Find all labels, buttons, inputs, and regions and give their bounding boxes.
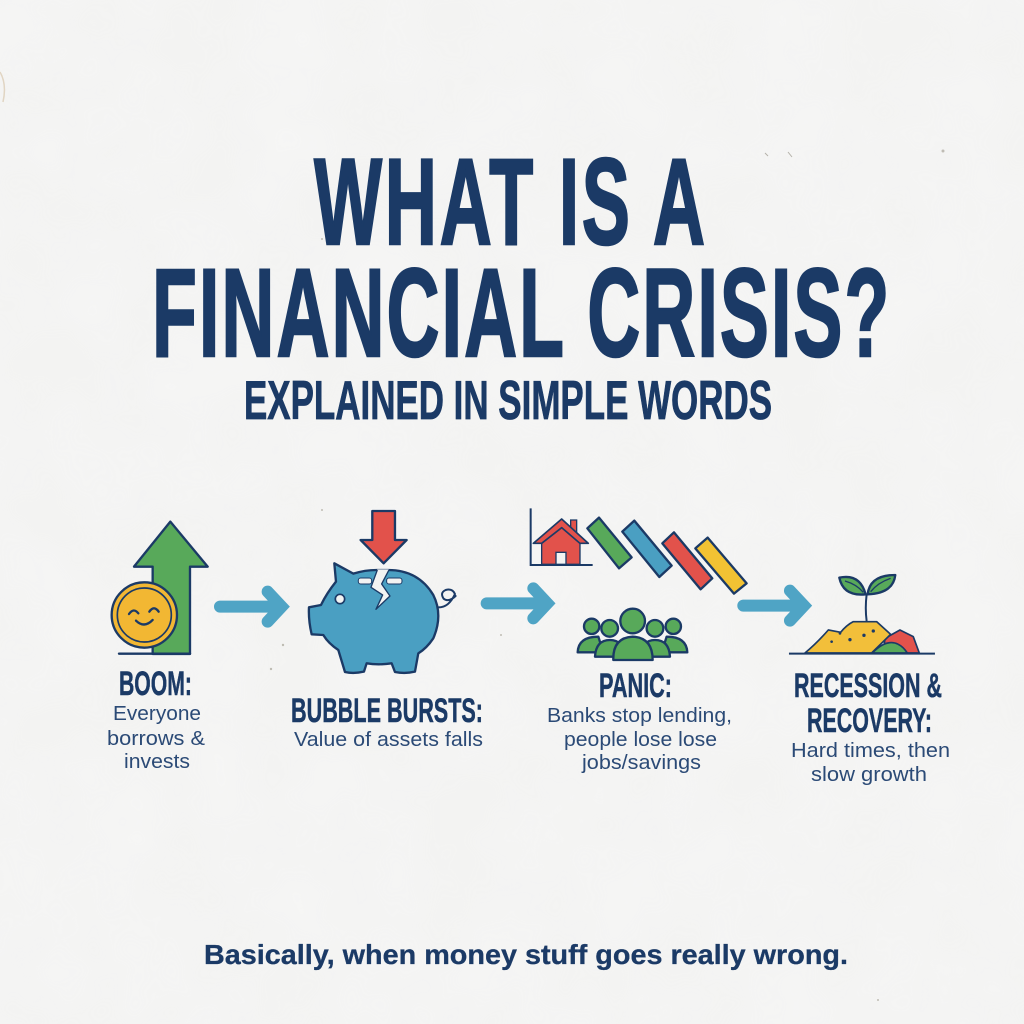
title: WHAT IS A [314,134,705,271]
footer tagline: Basically, when money stuff goes really wrong. [204,939,848,970]
arrow: bubble to panic [487,588,547,618]
step: bubble bursts [291,511,483,751]
text: boom description: Everyone [113,703,201,725]
text: panic description: people lose lose [564,729,717,751]
arrow: boom to bubble [220,592,282,622]
icon: sprout growing from mound [789,575,935,654]
icon: group of people [578,609,687,660]
icon: cracked piggy bank with red arrow [309,511,456,673]
text: bubble bursts description: Value of assets falls [294,729,483,751]
step: panic [531,508,747,774]
arrow: panic to recovery [743,591,804,621]
label: recession and recovery [794,667,942,740]
label: panic: PANIC: [599,667,672,705]
label: boom: BOOM: [119,665,192,703]
title: FINANCIAL CRISIS? [152,242,889,383]
text: boom description: borrows & [107,728,206,750]
step: recession and recovery [789,575,950,786]
icon: house on chart with falling dominoes [531,508,747,594]
title [152,134,889,383]
text: recession description: slow growth [811,764,927,786]
label: recession and recovery: RECOVERY: [807,702,932,740]
text: panic description: jobs/savings [581,752,701,774]
icon: green up arrow with smiling coin [112,522,208,654]
text: panic description [547,705,732,774]
text: recession description: Hard times, then [791,740,950,762]
text: recession description [791,740,950,786]
label: bubble bursts: BUBBLE BURSTS: [291,692,483,730]
text: boom description [107,703,206,773]
text: panic description: Banks stop lending, [547,705,732,727]
step: boom [107,522,208,773]
text: boom description: invests [124,751,190,773]
